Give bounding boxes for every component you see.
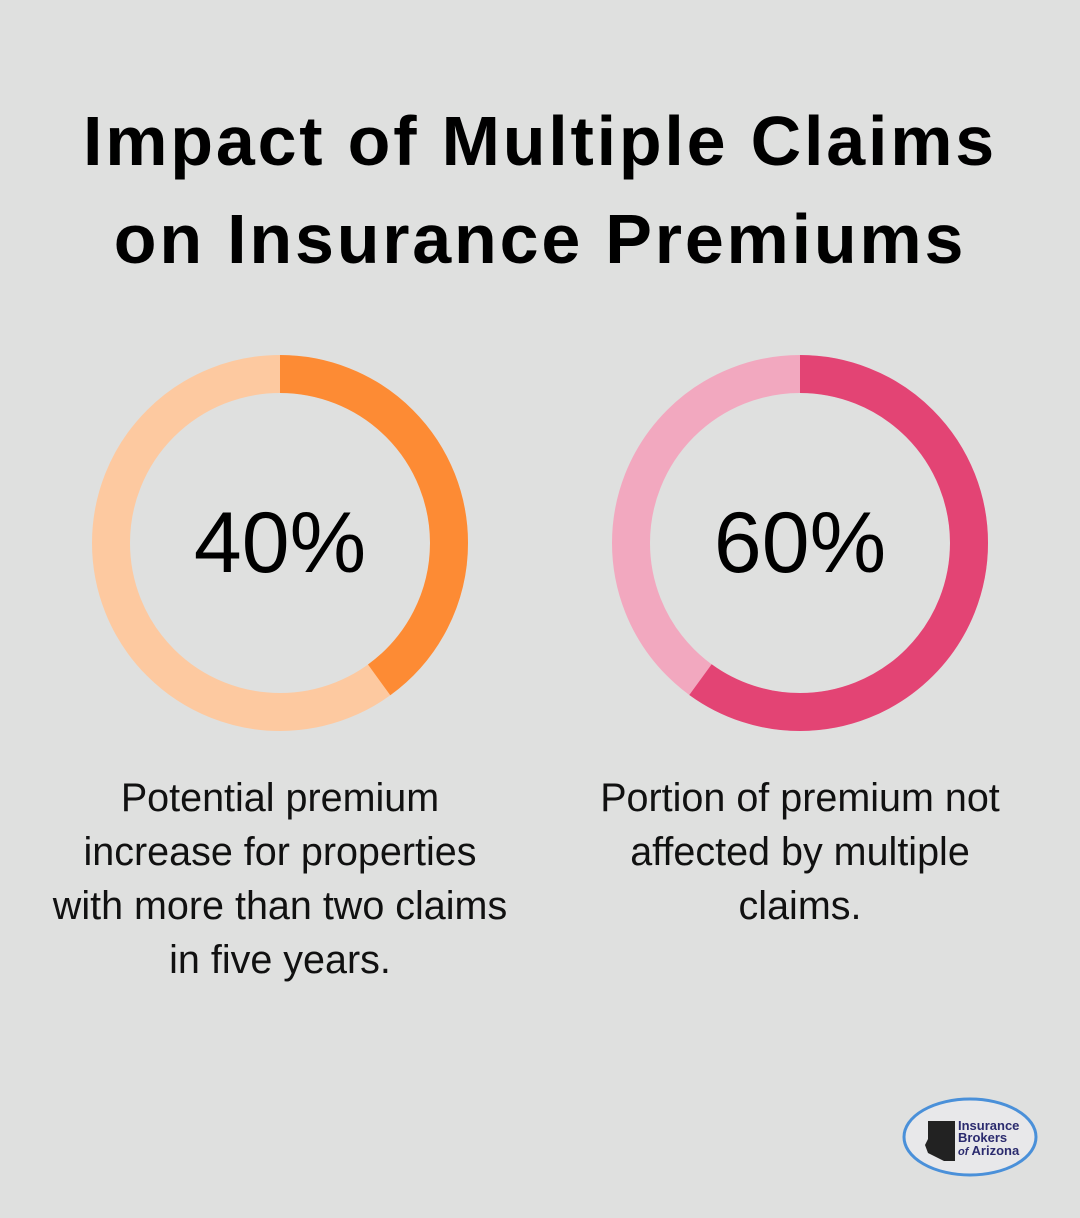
text: 60% description: claims. — [739, 884, 861, 928]
title — [83, 102, 997, 278]
logo — [902, 1098, 1038, 1176]
text: 40% description: with more than two claims — [53, 884, 507, 928]
logo: Insurance — [958, 1118, 1019, 1133]
text: 60% description — [600, 776, 1000, 928]
text: 40% description: increase for properties — [84, 830, 476, 874]
title: Impact of Multiple Claims — [83, 102, 997, 180]
text: 40% description: Potential premium — [121, 776, 439, 820]
donut chart: 40%: 40% — [194, 495, 366, 591]
title: on Insurance Premiums — [114, 200, 966, 278]
donut chart: 40% — [92, 355, 468, 731]
text: 40% description: in five years. — [169, 938, 391, 982]
donut chart: 60%: 60% — [714, 495, 886, 591]
text: 40% description — [52, 776, 507, 982]
logo: Brokers — [958, 1130, 1007, 1145]
text: 60% description: Portion of premium not — [600, 776, 1000, 820]
donut chart: 60% — [612, 355, 988, 731]
text: 60% description: affected by multiple — [630, 830, 970, 874]
logo: of Arizona — [958, 1143, 1020, 1158]
